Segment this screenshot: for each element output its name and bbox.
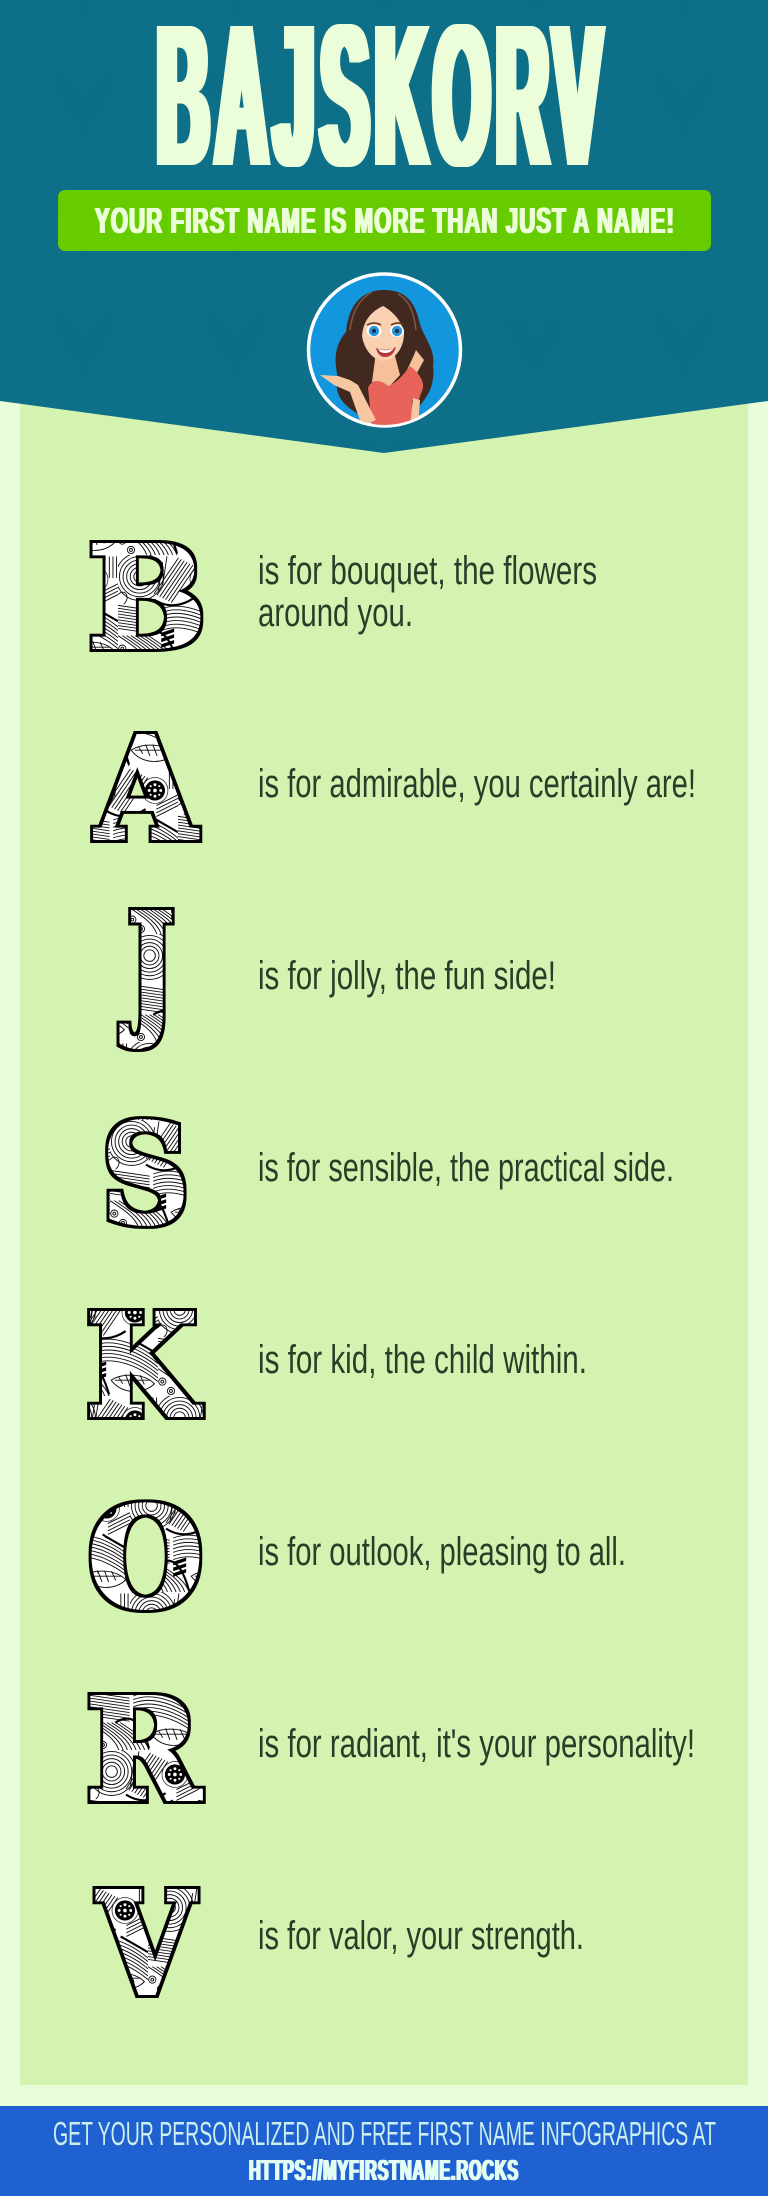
icon: avatar woman in circle [308,274,460,426]
letter row 5: K [86,1285,587,1449]
text J: is for jolly, the fun side! [258,954,556,998]
text V: is for valor, your strength. [258,1914,584,1958]
footer link: HTTPS://MYFIRSTNAME.ROCKS [249,2155,519,2187]
text K: is for kid, the child within. [258,1338,587,1382]
letter row 3: J [121,882,556,1051]
panel: letters background [20,380,748,2085]
letter O: O [88,1478,203,1639]
text B [258,549,597,635]
text B: around you. [258,591,413,635]
letter A: A [94,708,198,872]
letter B: B [88,517,206,681]
text O: is for outlook, pleasing to all. [258,1530,626,1574]
letter row 6: O [88,1478,626,1639]
header band [0,0,768,453]
footer band [0,2106,768,2196]
subtitle banner [58,190,711,251]
letter row 8: V [97,1863,584,2027]
letter row 4: S [102,1095,674,1255]
text B: is for bouquet, the flowers [258,549,597,593]
letter R: R [86,1669,202,1833]
letter V: V [97,1863,196,2027]
letter row 7: R [86,1669,695,1833]
letter K: K [86,1285,201,1449]
letter J: J [121,882,174,1051]
letter row 1: B [88,517,597,681]
letter row 2: A [94,708,696,872]
letter S: S [102,1095,189,1255]
